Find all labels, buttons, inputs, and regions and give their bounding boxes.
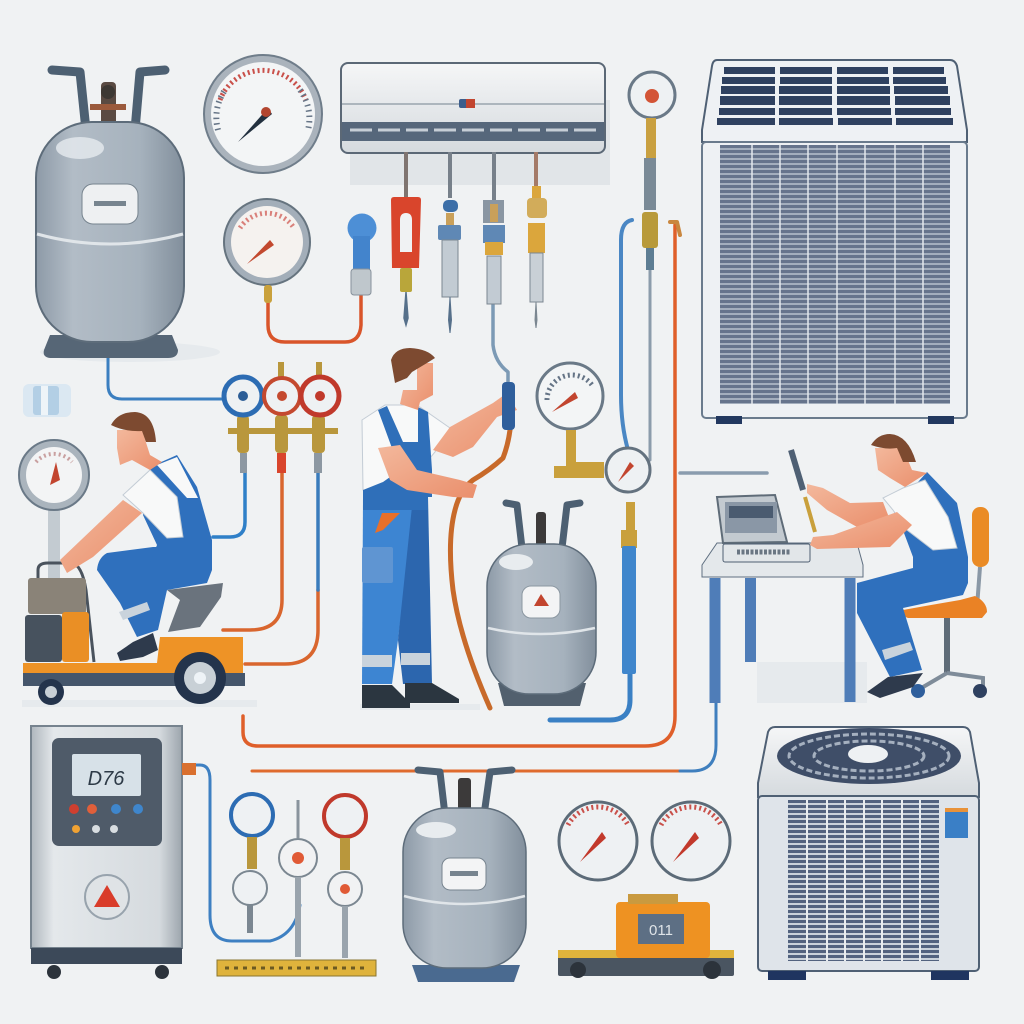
boots (362, 685, 410, 708)
coil grille (788, 800, 939, 961)
front arm (378, 445, 477, 498)
manifold gauges (224, 362, 339, 473)
technician left (60, 412, 223, 661)
label (442, 858, 486, 890)
hose nozzle (502, 382, 515, 430)
chair (903, 507, 989, 698)
bib straps (363, 406, 432, 497)
shoe (867, 673, 923, 698)
label (522, 586, 560, 618)
red clamp tool (391, 152, 421, 325)
gauge left (559, 802, 637, 880)
coil grille (720, 145, 950, 404)
light trouser (362, 497, 415, 684)
hand tool (791, 450, 803, 490)
trousers (97, 547, 212, 637)
big gauge top (204, 55, 322, 173)
body (758, 796, 979, 971)
tank base (498, 683, 586, 706)
knee stripe (882, 642, 913, 660)
cabinet foot (31, 948, 182, 964)
vacuum pump (38, 563, 94, 662)
center right gauge (537, 363, 650, 492)
orange device on cart (558, 894, 734, 979)
orange device on cart: 011 (649, 922, 673, 939)
handles (506, 503, 580, 548)
tank handles (52, 70, 165, 130)
back arm (433, 393, 517, 457)
neck and face (400, 363, 433, 410)
bib (893, 472, 968, 570)
tank body (36, 122, 184, 342)
red gauge (324, 795, 366, 958)
brass manifold (228, 362, 338, 453)
bottom right condenser (758, 727, 979, 980)
blue vertical fitting (621, 502, 637, 674)
yellow ruler base (217, 960, 376, 976)
lower gauges set (217, 794, 376, 976)
trousers (857, 568, 968, 677)
desk legs (715, 578, 850, 703)
cart wheels (174, 652, 226, 704)
hanging service tools (391, 152, 547, 333)
floor shadows (22, 342, 867, 710)
right desk with technician (702, 434, 989, 703)
shoe (117, 633, 158, 661)
desk (702, 543, 863, 577)
dark trouser (398, 497, 432, 684)
small label icon (23, 384, 71, 417)
valve (101, 82, 116, 126)
display (72, 754, 141, 796)
tank label (82, 184, 138, 224)
knee stripes (362, 653, 430, 667)
unit body (702, 142, 967, 418)
hair (871, 434, 916, 462)
blue gauge (231, 794, 273, 933)
probe two (438, 152, 461, 333)
unit roof (702, 60, 967, 142)
overall bib (143, 455, 212, 562)
blue manifold gauge (224, 377, 262, 415)
lower arm (810, 512, 912, 549)
reflective stripe (119, 602, 150, 620)
grey boot (167, 583, 223, 632)
center sight (279, 800, 317, 957)
pipes network (108, 220, 767, 941)
shirt back (123, 470, 183, 538)
indoor AC unit (341, 63, 610, 185)
cargo pocket (362, 547, 393, 583)
blue label (945, 808, 968, 838)
triangle badge (85, 875, 129, 919)
probe three (483, 152, 505, 304)
arm (60, 500, 142, 573)
body (403, 808, 526, 968)
roof vents (717, 67, 953, 125)
center tank (487, 503, 596, 706)
technician right (791, 434, 968, 698)
buttons (69, 804, 79, 814)
probe four (527, 152, 547, 328)
base (412, 965, 520, 982)
head (117, 430, 162, 470)
keyboard (723, 544, 810, 562)
body (487, 544, 596, 694)
red manifold gauge (301, 377, 339, 415)
shirt (362, 405, 450, 490)
top housing (758, 727, 979, 797)
belt (363, 497, 428, 510)
control cabinet: D76 (88, 768, 125, 790)
cart deck (23, 637, 243, 673)
blue bulb fitting (348, 214, 376, 295)
tank base (44, 335, 178, 358)
right outdoor condenser (702, 60, 967, 424)
laptop (717, 495, 787, 543)
shirt shoulder (157, 457, 198, 498)
tank top left (36, 70, 184, 358)
valve stems (240, 453, 322, 473)
left wall gauge (19, 440, 89, 580)
gauge right (652, 802, 730, 880)
shirt (883, 480, 957, 550)
fan (777, 728, 961, 784)
middle manifold gauge (264, 378, 300, 414)
bottom tank (403, 770, 526, 982)
handles (418, 770, 512, 815)
face (875, 448, 927, 487)
control cabinet (31, 726, 196, 979)
orange pocket (375, 513, 400, 533)
feet (768, 971, 806, 980)
right gauge and brass fittings (629, 72, 675, 270)
bottom gauges (559, 802, 730, 880)
feet (716, 416, 742, 424)
pump cart with technician (23, 412, 245, 705)
hair (391, 348, 435, 383)
raised arm (807, 484, 890, 527)
central technician (362, 348, 517, 708)
hair (111, 412, 156, 442)
second gauge (224, 199, 310, 303)
